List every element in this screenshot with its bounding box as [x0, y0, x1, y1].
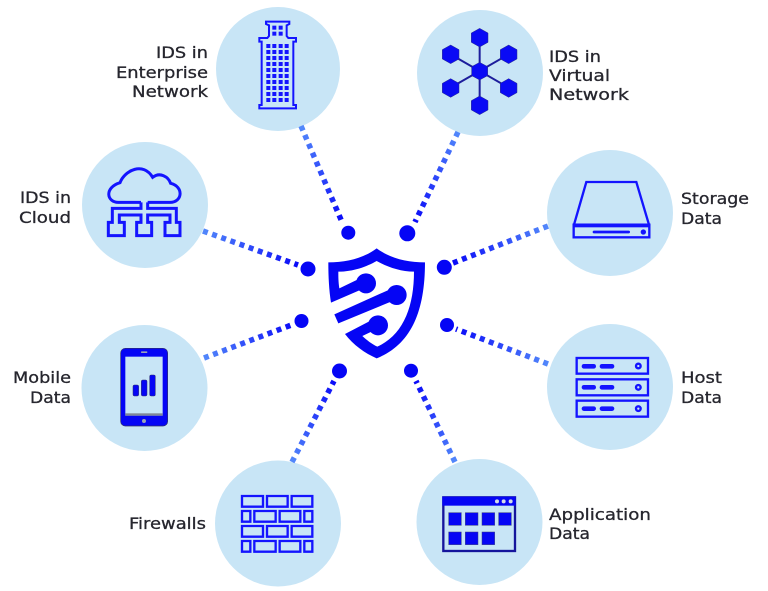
- panel: IDS in Enterprise Network: [116, 7, 340, 131]
- node circle: application: [416, 459, 542, 585]
- label: Storage Data: [681, 189, 749, 228]
- panel: Application Data: [416, 459, 651, 585]
- label: IDS in Cloud: Cloud: [19, 208, 71, 227]
- icon: smartphone with bars: [121, 348, 168, 426]
- label: Host Data: Host: [681, 368, 722, 387]
- panel: IDS in Virtual Network: [417, 10, 630, 136]
- central shield icon: [328, 248, 425, 358]
- label: IDS in Cloud: IDS in: [20, 188, 71, 207]
- connectors: dotted lines to the shield: [203, 126, 548, 462]
- label: Host Data: Data: [681, 388, 722, 407]
- label: Application Data: Application: [549, 505, 651, 524]
- panel: Mobile Data: [13, 325, 208, 451]
- icon: brick wall: [242, 496, 312, 552]
- label: Host Data: [681, 368, 722, 407]
- connector end dots: [294, 225, 454, 378]
- panel: Host Data: [547, 324, 722, 450]
- icon: hexagon network: [442, 28, 517, 115]
- label: IDS in Virtual Network: Network: [549, 85, 630, 104]
- icon: server rack: [577, 358, 648, 417]
- label: Mobile Data: Data: [30, 388, 71, 407]
- panel: Storage Data: [547, 150, 749, 276]
- label: Mobile Data: Mobile: [13, 368, 71, 387]
- icon: application window: [442, 497, 516, 551]
- node circle: storage: [547, 150, 673, 276]
- icon: storage drive: [574, 182, 649, 237]
- node circle: virtual network: [417, 10, 543, 136]
- label: IDS in Virtual Network: [549, 47, 630, 104]
- label: Storage Data: Storage: [681, 189, 749, 208]
- label: Firewalls: Firewalls: [129, 514, 206, 533]
- node circle: enterprise: [216, 7, 340, 131]
- label: IDS in Virtual Network: IDS in: [549, 47, 601, 66]
- node circle: mobile: [82, 325, 208, 451]
- label: IDS in Enterprise Network: Enterprise: [116, 63, 208, 82]
- node circle: host: [547, 324, 673, 450]
- label: Application Data: Data: [549, 524, 590, 543]
- panel: Firewalls: [129, 460, 341, 586]
- label: IDS in Cloud: [19, 188, 71, 227]
- label: IDS in Enterprise Network: IDS in: [156, 43, 208, 62]
- node circle: firewalls: [215, 460, 341, 586]
- icon: office building: [259, 22, 296, 108]
- label: Storage Data: Data: [681, 209, 722, 228]
- label: Mobile Data: [13, 368, 71, 407]
- label: IDS in Enterprise Network: Network: [132, 82, 209, 101]
- panel: IDS in Cloud: [19, 142, 208, 268]
- label: Application Data: [549, 505, 651, 543]
- label: IDS in Virtual Network: Virtual: [549, 66, 610, 85]
- icon: cloud hierarchy: [108, 169, 180, 236]
- node circle: cloud: [82, 142, 208, 268]
- label: IDS in Enterprise Network: [116, 43, 209, 101]
